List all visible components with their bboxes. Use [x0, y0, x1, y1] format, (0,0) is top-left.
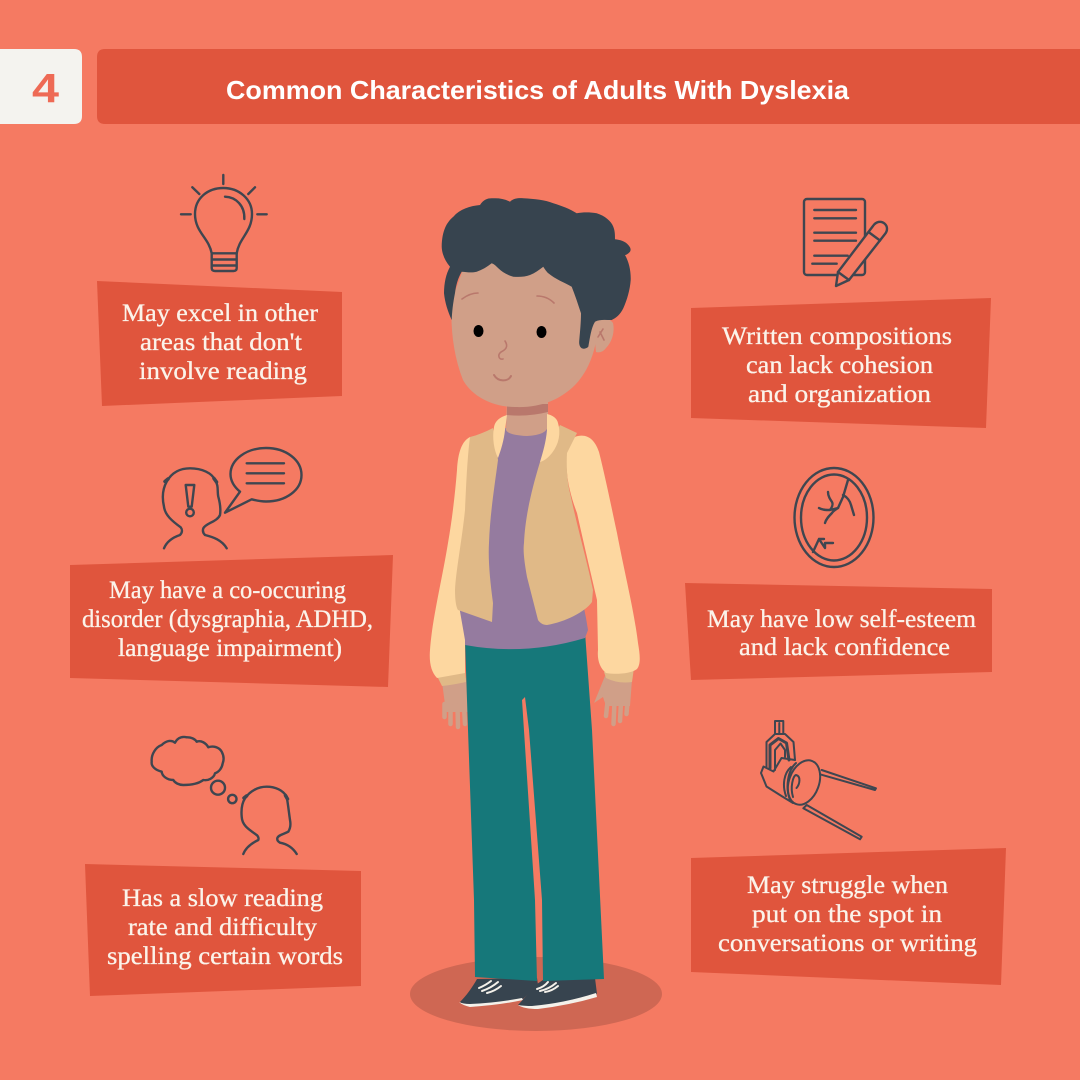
icon: cracked mirror [794, 468, 874, 567]
panel: co-occurring disorder: language impairment) [118, 635, 342, 662]
eyes [474, 325, 546, 338]
panel: written compositions [691, 298, 991, 428]
trousers [465, 632, 604, 981]
icon: document and pencil [804, 199, 887, 286]
right shoe [518, 978, 597, 1009]
brows, nose, smile, ear detail [462, 293, 604, 380]
panel: low self-esteem [685, 583, 992, 680]
number badge: 4 [32, 65, 59, 111]
neck shadow [507, 404, 548, 416]
panel: written compositions: can lack cohesion [746, 352, 934, 379]
panel: slow reading rate: rate and difficulty [128, 914, 318, 941]
panel: low self-esteem: May have low self-esteem [707, 606, 977, 633]
panel: written compositions: Written compositions [722, 323, 952, 350]
icon: light bulb [181, 175, 267, 271]
vest left panel [455, 428, 498, 622]
icon: spotlight [761, 721, 876, 839]
right cuff [604, 668, 634, 682]
icon: head with speech bubble [163, 448, 302, 548]
panel: co-occurring disorder: disorder (dysgraphia, ADHD, [82, 606, 373, 633]
panel: excel in other areas: areas that don't [140, 329, 302, 356]
ground shadow [410, 957, 662, 1031]
character illustration [410, 198, 662, 1031]
left sleeve [430, 437, 470, 678]
panel: slow reading rate: Has a slow reading [122, 885, 324, 912]
panel: excel in other areas: involve reading [139, 358, 308, 385]
panel: put on the spot: put on the spot in [752, 901, 943, 928]
panel: low self-esteem: and lack confidence [739, 634, 950, 661]
number badge [0, 49, 82, 124]
right sleeve [566, 436, 640, 674]
neck [506, 400, 548, 436]
panel: excel in other areas [97, 281, 342, 406]
panel: slow reading rate [85, 864, 361, 996]
right hand [594, 676, 632, 724]
collar left [493, 415, 507, 458]
purple shirt [456, 428, 588, 649]
panel: put on the spot: conversations or writing [718, 930, 978, 957]
title banner: Common Characteristics of Adults With Dyslexia [226, 75, 850, 105]
panel: excel in other areas: May excel in other [122, 300, 319, 327]
icon: head with thought cloud [152, 737, 297, 854]
hair [442, 198, 631, 349]
panel: put on the spot: May struggle when [747, 872, 949, 899]
panel: slow reading rate: spelling certain words [107, 943, 343, 970]
title banner [97, 49, 1080, 124]
face [451, 240, 598, 407]
panel: written compositions: and organization [748, 381, 932, 408]
left shoe [459, 978, 538, 1007]
ear [593, 318, 614, 352]
left hand [442, 678, 468, 727]
collar right [540, 414, 559, 462]
panel: co-occurring disorder: May have a co-occuring [109, 577, 346, 604]
left cuff [437, 670, 466, 686]
vest right panel [524, 425, 593, 625]
panel: co-occurring disorder [70, 555, 393, 687]
panel: put on the spot [691, 848, 1006, 985]
